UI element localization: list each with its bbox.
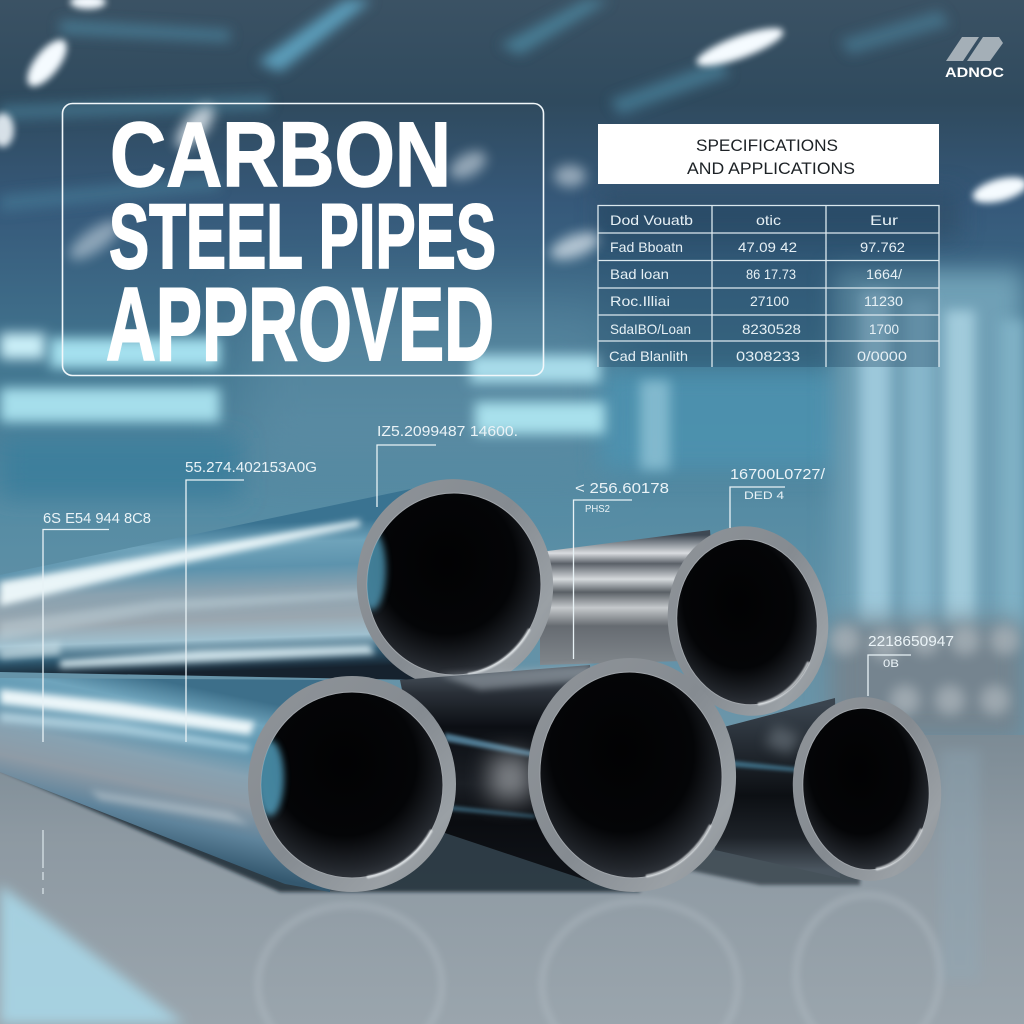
table row 1: Fad Bboatn [610, 239, 683, 255]
callout 3 [377, 423, 518, 507]
pipe: right front [715, 690, 950, 888]
table row 3: Roc.Illiai [610, 293, 670, 309]
table row 1: 47.09 42 [738, 239, 797, 255]
specifications table [598, 206, 939, 367]
callout 4: < 256.60178 [575, 480, 669, 497]
callout 6: 2218650947 [868, 633, 954, 650]
title text: APPROVED [106, 267, 494, 383]
specifications header: SPECIFICATIONS [696, 136, 838, 155]
table row 3 [610, 293, 903, 309]
table row 5: 0308233 [736, 348, 800, 364]
pipe: back right [540, 516, 840, 726]
pipe: centre front [400, 651, 744, 899]
table row 4 [610, 321, 899, 337]
specifications header [598, 124, 939, 184]
pipe: bottom left [0, 676, 456, 892]
callout 5: DED 4 [744, 490, 784, 502]
table row 4: 1700 [869, 321, 899, 337]
callout 5 [730, 466, 826, 528]
title text: STEEL PIPES [109, 186, 496, 288]
table row 2: Bad loan [610, 266, 669, 282]
table row 2 [610, 266, 902, 282]
pipe: top left [0, 466, 567, 702]
title text: CARBON [110, 104, 451, 206]
title text [106, 104, 496, 383]
logo: ADNOC: ADNOC [945, 65, 1004, 80]
ceiling lights [0, 0, 1024, 266]
callout 5: 16700L0727/ [730, 466, 826, 483]
callout 2: 55.274.402153A0G [185, 459, 317, 476]
floor [0, 700, 1024, 1024]
specifications header: AND APPLICATIONS [687, 159, 855, 178]
table row 3: 27100 [750, 293, 789, 309]
callout 1: 6S E54 944 8C8 [43, 510, 151, 527]
callout 1 [43, 510, 151, 894]
table row 4: SdaIBO/Loan [610, 321, 691, 337]
table row 2: 1664/ [866, 266, 902, 282]
callout 2 [185, 459, 317, 742]
table row 5: 0/0000 [857, 348, 907, 364]
table row: header: Eur [870, 212, 898, 228]
callout 6 [868, 633, 954, 696]
callout 4: PHS2 [585, 504, 610, 515]
table row 2: 86 17.73 [746, 266, 796, 282]
table row 5: Cad Blanlith [609, 348, 688, 364]
table row 3: 11230 [864, 293, 903, 309]
table row 1: 97.762 [860, 239, 905, 255]
table row: header: otic [756, 212, 781, 228]
callout 6: 0B [883, 658, 899, 670]
callout 3: IZ5.2099487 14600. [377, 423, 518, 440]
callout 4 [574, 480, 669, 659]
table row 5 [609, 348, 907, 364]
table row: header [610, 212, 898, 228]
table row 1 [610, 239, 905, 255]
table row 4: 8230528 [742, 321, 801, 337]
table row: header: Dod Vouatb [610, 212, 693, 228]
title box [62, 104, 544, 383]
logo: ADNOC [945, 37, 1004, 80]
